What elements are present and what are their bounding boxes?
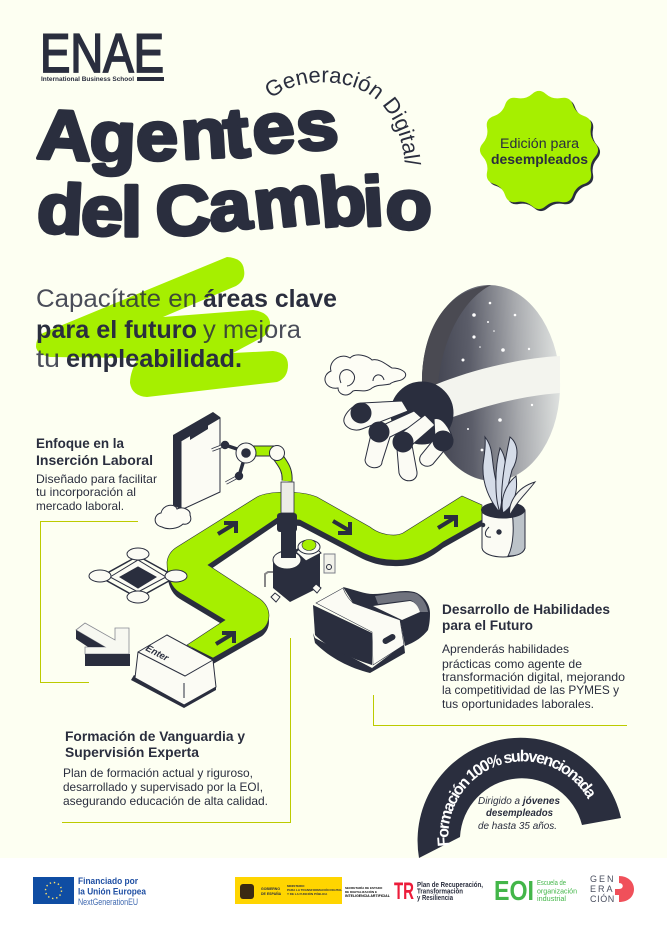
logo: Generación D: CIÓN — [590, 894, 615, 904]
text block: Enfoque en la Inserción Laboral: mercado laboral. — [36, 499, 124, 513]
illustration: phone — [155, 412, 220, 529]
tagline — [36, 285, 337, 373]
logo: Plan de Recuperación: TR — [394, 878, 414, 905]
arch: Formación 100% subvencionada — [418, 738, 621, 858]
title: Agentes del Cambio — [35, 85, 434, 251]
text block: Enfoque en la Inserción Laboral — [36, 436, 157, 513]
logo: Gobierno de España: PARA LA TRANSFORMACIÓN DIGITAL — [287, 887, 342, 892]
logo: EOI: EOI — [494, 875, 534, 906]
light band — [432, 356, 560, 418]
icon: cloud — [325, 355, 406, 395]
illustration: big arrow — [76, 623, 130, 666]
tagline: tu — [36, 345, 60, 373]
logo: EOI: Escuela de — [537, 880, 566, 887]
text block: Enfoque en la Inserción Laboral: Enfoque en la — [36, 436, 124, 451]
text block: Formación de Vanguardia — [63, 729, 268, 808]
text block: Desarrollo de Habilidades: la competitividad de las PYMES y — [442, 683, 619, 697]
logo: Gobierno de España: SECRETARÍA DE ESTADO — [345, 885, 383, 890]
illustration: Enter key — [131, 635, 216, 708]
tagline: Capacítate en — [36, 285, 197, 313]
tagline: y mejora — [203, 316, 301, 344]
logo: EU — [33, 876, 147, 907]
badge: Edición para desempleados: Edición para — [500, 136, 580, 151]
logo: Plan de Recuperación: Plan de Recuperación, — [417, 882, 483, 889]
text block: Formación de Vanguardia: asegurando educación de alta calidad. — [63, 794, 268, 808]
title: Agentes del Cambio: Agentes — [35, 85, 341, 177]
logo: Generación D — [590, 874, 634, 904]
logo: Gobierno de España: DE ESPAÑA — [261, 891, 282, 896]
text block: Desarrollo de Habilidades: Aprenderás habilidades — [442, 642, 569, 656]
logo: ENAE: ENAE — [40, 22, 164, 84]
logo: Generación D: GEN — [590, 874, 616, 884]
logo: EOI: organización — [537, 888, 577, 896]
logo: Gobierno de España — [235, 877, 391, 904]
logo: Gobierno de España: GOBIERNO — [261, 887, 280, 891]
arch: Formación 100% subvencionada: Formación 100% subvencionada — [437, 750, 594, 846]
logo: Gobierno de España: MINISTERIO — [287, 884, 305, 888]
tagline: empleabilidad. — [66, 345, 242, 373]
illustration: road — [167, 492, 482, 664]
text block: Desarrollo de Habilidades: para el Futuro — [442, 618, 533, 633]
text block: Formación de Vanguardia: Plan de formación actual y riguroso, — [63, 766, 253, 780]
footer — [0, 858, 667, 939]
text block: Desarrollo de Habilidades: tus oportunidades laborales. — [442, 697, 594, 711]
logo: Gobierno de España: Y DE LA FUNCIÓN PÚBLICA — [287, 891, 328, 896]
illustration: VR headset — [313, 587, 430, 673]
logo: ENAE: International Business School — [41, 77, 134, 83]
badge: Edición para desempleados — [480, 91, 600, 211]
illustration: drone — [89, 548, 187, 603]
road arrows — [216, 517, 456, 644]
text block: Desarrollo de Habilidades — [442, 602, 625, 711]
text block: Formación de Vanguardia: Formación de Vanguardia y — [65, 729, 245, 744]
illustration: egg with galaxy — [419, 283, 563, 483]
title: Agentes del Cambio: del Cambio — [35, 160, 434, 251]
tagline: para el futuro — [36, 316, 197, 344]
text block: Formación de Vanguardia: desarrollado y supervisado por la EOI, — [63, 780, 263, 794]
logo: EOI — [494, 875, 577, 906]
logo: EU: NextGenerationEU — [78, 897, 138, 907]
illustration: hand — [344, 382, 453, 481]
text block: Enfoque en la Inserción Laboral: Diseñado para facilitar — [36, 472, 157, 486]
logo: Plan de Recuperación — [394, 878, 483, 905]
tagline: áreas clave — [203, 285, 337, 313]
logo: Gobierno de España: DE DIGITALIZACIÓN E — [345, 889, 377, 894]
illustration: Enter key: Enter — [144, 643, 171, 665]
scribble: lime highlight — [36, 257, 288, 397]
arc heading: Generación Digital: Generación Digital/ — [266, 70, 422, 164]
text block: Enfoque en la Inserción Laboral: Inserción Laboral — [36, 453, 153, 468]
text block: Desarrollo de Habilidades: transformación digital, mejorando — [442, 670, 625, 684]
illustration: robot machine and arm — [212, 441, 335, 602]
small cloud — [155, 505, 191, 529]
logo: Plan de Recuperación: y Resiliencia — [417, 895, 453, 902]
badge: Edición para desempleados: desempleados — [491, 152, 588, 167]
logo: EU: la Unión Europea — [78, 886, 147, 896]
logo: Gobierno de España: INTELIGENCIA ARTIFICIAL — [345, 894, 391, 898]
text block: Formación de Vanguardia: Supervisión Experta — [65, 745, 200, 760]
text block: Desarrollo de Habilidades: Desarrollo de Habilidades — [442, 602, 610, 617]
callout: Dirigido a jóvenes — [478, 795, 560, 832]
callout: Dirigido a jóvenes: de hasta 35 años. — [478, 820, 557, 832]
callout: Dirigido a jóvenes: desempleados — [486, 807, 553, 819]
logo: EU: Financiado por — [78, 876, 138, 886]
logo: Generación D: ERA — [590, 884, 615, 894]
text block: Enfoque en la Inserción Laboral: tu incorporación al — [36, 485, 136, 499]
text block: Desarrollo de Habilidades: prácticas como agente de — [442, 657, 582, 671]
logo: EOI: industrial — [537, 896, 566, 903]
callout: Dirigido a jóvenes: Dirigido a jóvenes — [478, 795, 560, 807]
illustration: plant pot — [481, 437, 535, 557]
logo: Plan de Recuperación: Transformación — [417, 888, 463, 896]
